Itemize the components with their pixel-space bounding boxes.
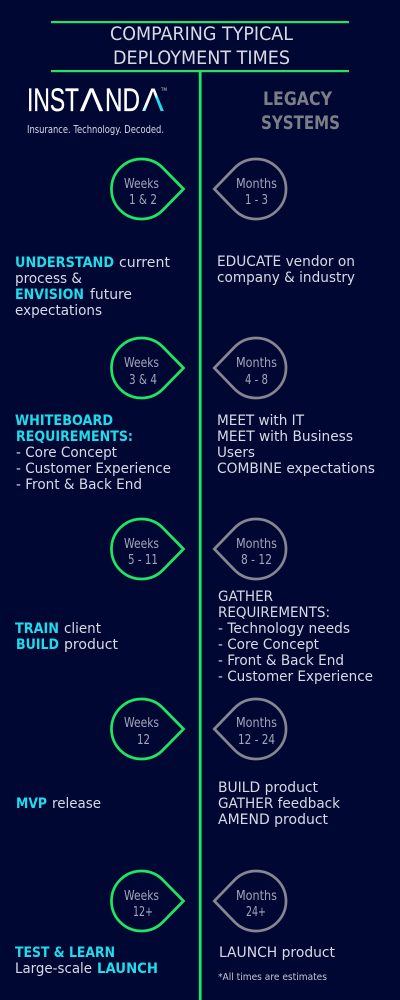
text: mvp release <box>16 796 101 812</box>
text: mvp release: MVP <box>16 796 47 812</box>
text: educate vendor: company & industry <box>217 270 355 286</box>
marker: weeks 12: 12 <box>137 733 150 748</box>
header rule bottom <box>51 70 349 72</box>
marker: weeks 1 & 2: 1 & 2 <box>129 193 157 208</box>
text: educate vendor <box>217 254 355 286</box>
marker: months 24+ <box>214 871 286 931</box>
text: gather requirements: - Technology needs <box>218 621 350 637</box>
marker: months 4 - 8 <box>214 338 286 398</box>
text: test and learn, launch: TEST & LEARN <box>15 945 115 961</box>
text: whiteboard requirements: - Front & Back End <box>16 477 142 493</box>
text: educate vendor: EDUCATE vendor on <box>217 254 355 270</box>
text: understand and envision: expectations <box>15 303 102 319</box>
marker: months 12 - 24 <box>214 699 286 759</box>
marker: months 1 - 3: 1 - 3 <box>245 193 268 208</box>
text: launch product: LAUNCH product <box>219 945 335 961</box>
heading: legacy systems: SYSTEMS <box>261 113 340 134</box>
logo: Instanda <box>27 82 167 136</box>
text: whiteboard requirements: - Core Concept <box>16 445 117 461</box>
marker: months 8 - 12: Months <box>236 537 277 552</box>
text: build gather amend: BUILD product <box>218 780 318 796</box>
title: COMPARING TYPICAL <box>110 24 294 45</box>
logo: Instanda: Λ <box>142 82 165 118</box>
text: test and learn, launch: LAUNCH <box>97 961 158 977</box>
text: gather requirements: REQUIREMENTS: <box>218 605 330 621</box>
marker: weeks 12: Weeks <box>124 716 159 731</box>
marker: months 1 - 3 <box>214 159 286 219</box>
text: meet and combine <box>217 413 375 477</box>
marker: weeks 3 & 4 <box>111 338 184 398</box>
text: train and build: BUILD <box>16 637 59 653</box>
marker: weeks 12+: 12+ <box>133 905 153 920</box>
logo: Instanda: Λ <box>80 82 104 118</box>
marker: weeks 12+: Weeks <box>124 889 159 904</box>
text: gather requirements: - Customer Experience <box>218 669 373 685</box>
marker: weeks 5 - 11: Weeks <box>124 537 159 552</box>
marker: months 12 - 24: Months <box>236 716 277 731</box>
text: understand and envision: UNDERSTAND <box>15 255 114 271</box>
text: train and build <box>15 621 118 653</box>
text: understand and envision: future <box>90 287 132 303</box>
title <box>110 24 294 69</box>
marker: months 4 - 8: Months <box>236 356 277 371</box>
text: build gather amend: AMEND product <box>218 812 328 828</box>
text: gather requirements <box>218 589 373 685</box>
marker: weeks 3 & 4: Weeks <box>124 356 159 371</box>
footnote: *All times are estimates <box>218 972 327 983</box>
logo: Instanda: TM <box>160 87 167 92</box>
text: build gather amend <box>218 780 341 828</box>
heading: legacy systems: LEGACY <box>263 89 333 110</box>
marker: months 24+: Months <box>236 889 277 904</box>
marker: months 8 - 12 <box>214 519 286 579</box>
text: meet and combine: MEET with IT <box>217 413 304 429</box>
text: gather requirements: - Front & Back End <box>218 653 344 669</box>
text: gather requirements: - Core Concept <box>218 637 319 653</box>
text: whiteboard requirements: - Customer Experience <box>16 461 171 477</box>
marker: weeks 1 & 2: Weeks <box>124 177 159 192</box>
text: mvp release: release <box>52 796 101 812</box>
marker: weeks 12 <box>111 699 184 759</box>
text: train and build: client <box>64 621 101 637</box>
title: DEPLOYMENT TIMES <box>113 48 290 69</box>
marker: weeks 12+ <box>111 871 184 931</box>
text: test and learn, launch <box>15 945 158 977</box>
marker: months 24+: 24+ <box>246 905 266 920</box>
text: understand and envision: ENVISION <box>15 287 84 303</box>
logo: Instanda: Insurance. Technology. Decoded. <box>27 124 164 136</box>
marker: months 1 - 3: Months <box>236 177 277 192</box>
text: build gather amend: GATHER feedback <box>218 796 341 812</box>
logo: Instanda: INST <box>27 82 79 118</box>
text: understand and envision <box>15 255 170 319</box>
marker: weeks 1 & 2 <box>111 159 184 219</box>
text: whiteboard requirements <box>15 413 171 493</box>
text: understand and envision: current <box>119 255 170 271</box>
heading: legacy systems <box>261 89 340 134</box>
header rule top <box>51 21 349 23</box>
logo: Instanda: ND <box>105 82 140 118</box>
text: test and learn, launch: Large-scale <box>15 961 92 977</box>
text: gather requirements: GATHER <box>218 589 273 605</box>
marker: weeks 5 - 11: 5 - 11 <box>128 553 158 568</box>
text: train and build: product <box>64 637 118 653</box>
marker: months 4 - 8: 4 - 8 <box>245 373 268 388</box>
marker: months 8 - 12: 8 - 12 <box>241 553 272 568</box>
text: meet and combine: Users <box>217 445 255 461</box>
text: whiteboard requirements: WHITEBOARD <box>15 413 113 429</box>
text: meet and combine: COMBINE expectations <box>217 461 375 477</box>
center divider <box>199 71 202 1000</box>
marker: weeks 3 & 4: 3 & 4 <box>129 373 157 388</box>
marker: weeks 5 - 11 <box>111 519 184 579</box>
text: train and build: TRAIN <box>15 621 59 637</box>
marker: months 12 - 24: 12 - 24 <box>238 733 275 748</box>
text: understand and envision: process & <box>15 271 82 287</box>
text: meet and combine: MEET with Business <box>217 429 353 445</box>
text: whiteboard requirements: REQUIREMENTS: <box>16 429 133 445</box>
